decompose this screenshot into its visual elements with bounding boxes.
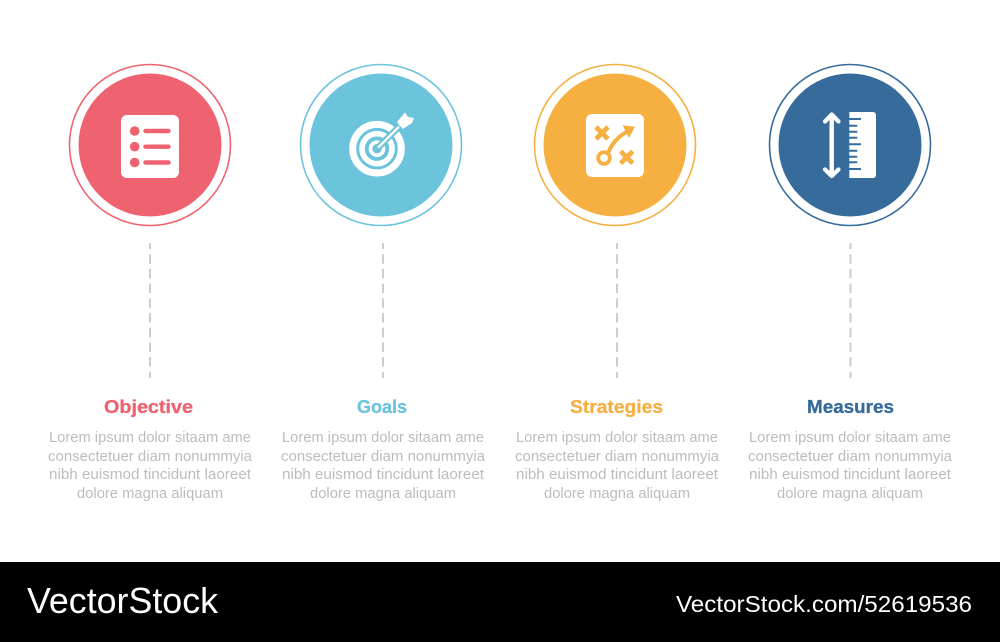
text block: goals: Goals: [357, 397, 407, 417]
text block: goals: dolore magna aliquam: [310, 485, 456, 502]
text block: measures: Lorem ipsum dolor sitaam ame: [749, 429, 951, 446]
icon: strategy board: [586, 114, 644, 177]
icon: list document: [121, 115, 179, 178]
text block: objective: [48, 397, 253, 502]
text block: goals: consectetuer diam nonummyia: [281, 448, 486, 465]
text block: goals: nibh euismod tincidunt laoreet: [282, 466, 485, 483]
text block: strategies: consectetuer diam nonummyia: [515, 448, 720, 465]
circle: measures: [770, 64, 930, 226]
circle: objective: [70, 64, 230, 226]
text block: objective: Objective: [104, 397, 193, 417]
text block: objective: dolore magna aliquam: [77, 485, 223, 502]
text block: objective: Lorem ipsum dolor sitaam ame: [49, 429, 251, 446]
text block: measures: [748, 397, 953, 502]
icon: ruler and arrow: [825, 112, 876, 178]
icon: target with dart: [353, 112, 414, 173]
text block: objective: consectetuer diam nonummyia: [48, 448, 253, 465]
text block: strategies: Lorem ipsum dolor sitaam ame: [516, 429, 718, 446]
text block: measures: nibh euismod tincidunt laoreet: [749, 466, 952, 483]
text block: strategies: [515, 397, 720, 502]
text block: strategies: Strategies: [570, 397, 663, 417]
circle: goals: [300, 64, 462, 226]
text block: measures: Measures: [807, 397, 894, 417]
circle: strategies: [534, 64, 696, 226]
text block: objective: nibh euismod tincidunt laoreet: [49, 466, 252, 483]
footer band: VectorStock.com/52619536: [676, 591, 972, 617]
text block: goals: [281, 397, 486, 502]
text block: measures: consectetuer diam nonummyia: [748, 448, 953, 465]
text block: goals: Lorem ipsum dolor sitaam ame: [282, 429, 484, 446]
dashed connectors: [150, 243, 850, 378]
text block: strategies: dolore magna aliquam: [544, 485, 690, 502]
footer band: VectorStock: [27, 580, 219, 621]
text block: measures: dolore magna aliquam: [777, 485, 923, 502]
footer band: [0, 562, 1000, 642]
text block: strategies: nibh euismod tincidunt laoreet: [516, 466, 719, 483]
